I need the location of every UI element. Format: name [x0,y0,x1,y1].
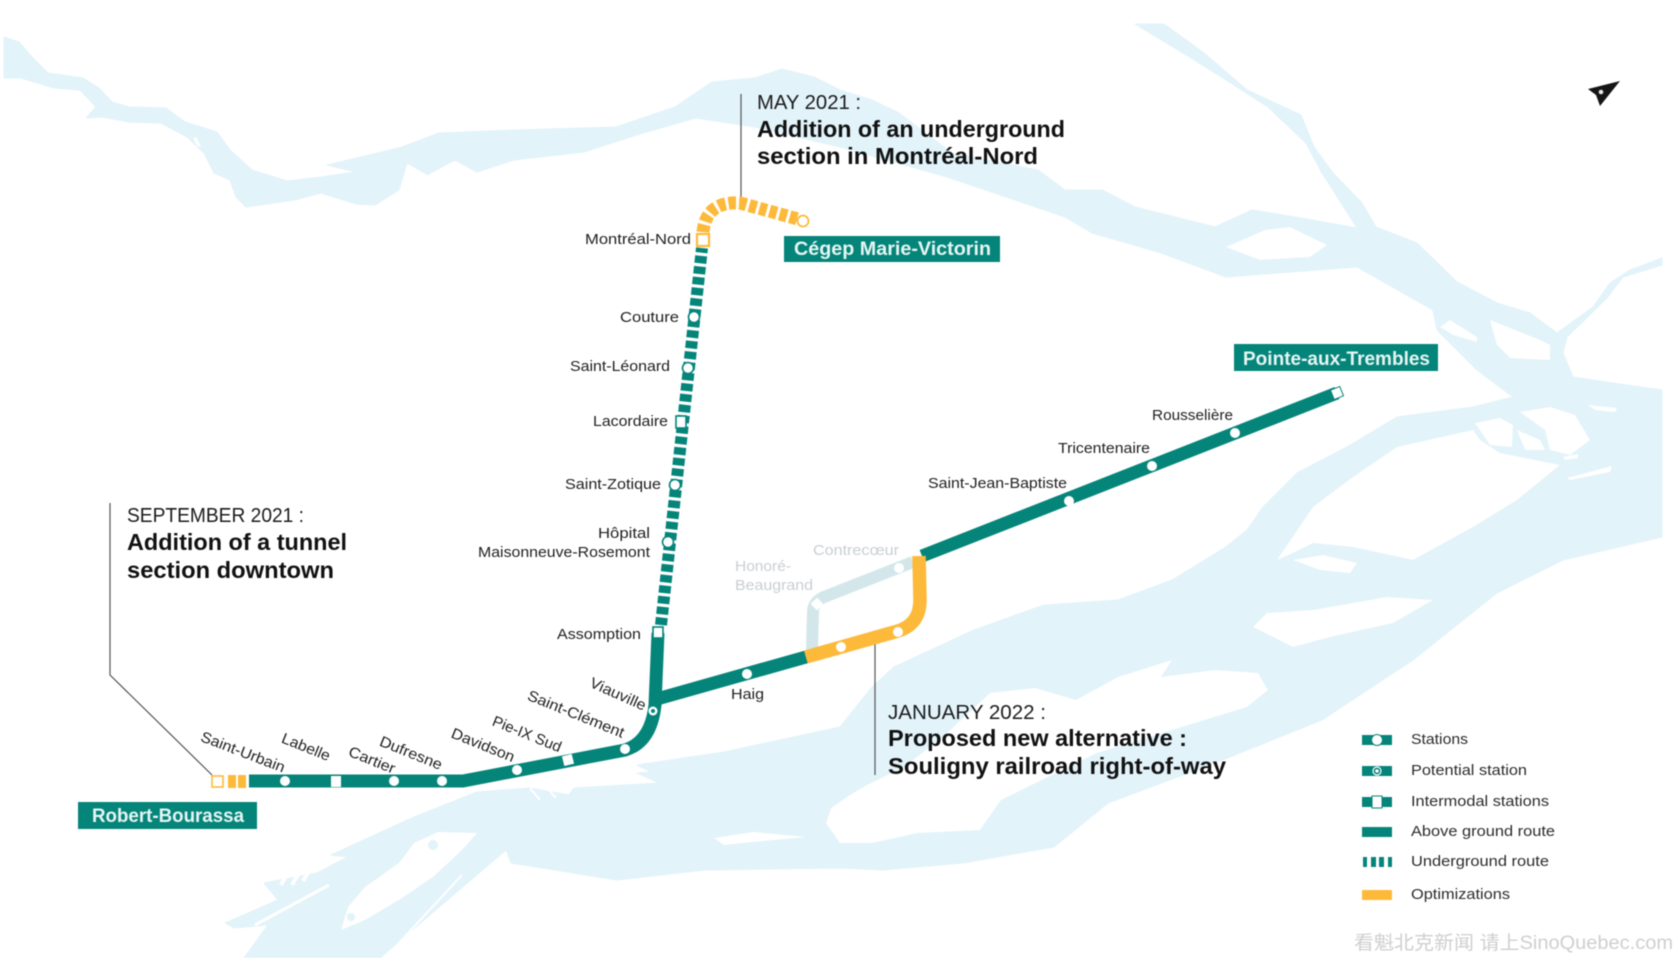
legend item: potential station: Potential station [1411,762,1527,779]
station labels: Saint-Clément [525,687,628,742]
station labels: Saint-Léonard [570,358,670,375]
station labels: Saint-Urbain [198,729,287,776]
station markers [212,216,1344,787]
legend item: above ground route: Above ground route [1411,823,1555,840]
station labels: Contrecœur [813,542,899,559]
optimization: Robert-Bourassa tunnel section [228,775,246,788]
station labels: Tricentenaire [1058,440,1150,457]
station labels: Maisonneuve-Rosemont [478,544,651,561]
route: downtown to east junction above ground [249,633,658,781]
terminus label: Cégep Marie-Victorin: Cégep Marie-Victorin [794,239,991,260]
station labels: Saint-Zotique [565,476,661,493]
callout: January 2022 [888,702,1226,779]
route: east to Pointe-aux-Trembles above ground [922,393,1337,556]
callout: January 2022: JANUARY 2022 : [888,702,1046,724]
station labels: Montréal-Nord [585,231,691,248]
station labels: Hôpital [598,525,650,542]
station labels: Pie-IX Sud [490,713,564,756]
station labels: Davidson [449,725,517,766]
legend item: underground route [1363,853,1549,870]
callout: May 2021: section in Montréal-Nord [757,143,1038,169]
legend item: above ground route [1362,823,1555,840]
route: east branch above ground [657,657,806,699]
terminus label: Robert-Bourassa: Robert-Bourassa [92,806,244,827]
current alternative route (pale) with stations [811,562,913,650]
station labels: Honoré- [735,558,791,575]
leader lines [110,94,875,775]
legend item: underground route: Underground route [1411,853,1549,870]
station labels: Dufresne [377,733,445,774]
legend [1362,731,1555,903]
station labels: Viauville [587,674,649,714]
legend item: potential station [1362,762,1527,779]
legend item: stations: Stations [1411,731,1468,748]
callout: September 2021: section downtown [127,557,334,583]
icon: north arrow [1588,81,1620,106]
route: underground section north [661,248,702,625]
callout: January 2022: Souligny railroad right-of-way [888,753,1226,779]
legend item: optimizations [1362,886,1510,903]
legend item: optimizations: Optimizations [1411,886,1510,903]
watermark: 看魁北克新闻 请上SinoQuebec.com [1354,932,1673,954]
station labels: Haig [731,686,764,703]
optimization: Montreal-Nord underground extension [703,203,798,232]
callout: May 2021: MAY 2021 : [757,92,861,114]
callout: September 2021: Addition of a tunnel [127,529,347,555]
legend item: intermodal stations: Intermodal stations [1411,793,1549,810]
station labels: Couture [620,309,679,326]
station labels [198,231,1233,778]
legend item: stations [1362,731,1468,748]
station labels: Beaugrand [735,577,813,594]
station labels: Lacordaire [593,413,668,430]
callout: January 2022: Proposed new alternative : [888,725,1187,751]
station labels: Rousselière [1152,407,1233,424]
callout: May 2021: Addition of an underground [757,116,1065,142]
callout: September 2021: SEPTEMBER 2021 : [127,505,304,527]
terminus label: Robert-Bourassa [78,802,257,829]
station labels: Cartier [346,743,398,778]
optimization: Souligny railroad alternative [806,556,920,657]
station labels: Labelle [279,730,333,765]
station labels: Assomption [557,626,641,643]
callout: May 2021 [757,92,1065,169]
callout: September 2021 [127,505,347,583]
station labels: Saint-Jean-Baptiste [928,475,1067,492]
legend item: intermodal stations [1362,793,1549,810]
terminus label: Pointe-aux-Trembles: Pointe-aux-Trembles [1243,349,1430,370]
